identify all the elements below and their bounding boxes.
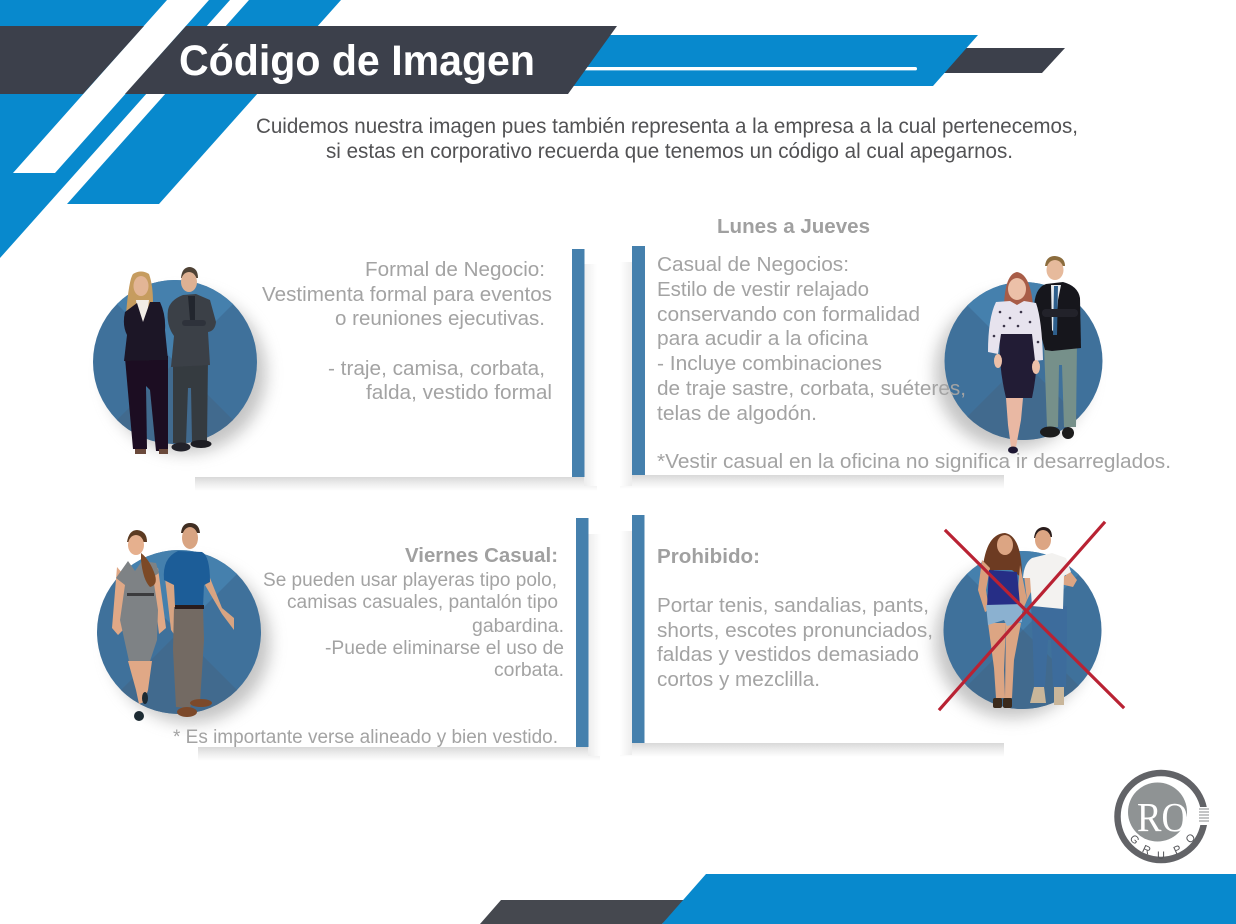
figure: man in t-shirt and jeans xyxy=(1023,527,1077,705)
panel text: camisas casuales, pantalón tipo xyxy=(287,592,558,613)
panel text: conservando con formalidad xyxy=(657,303,920,326)
panel text: gabardina. xyxy=(472,616,564,637)
panel text: falda, vestido formal xyxy=(366,381,552,404)
panel: viernes casual xyxy=(94,518,601,761)
panel text: *Vestir casual en la oficina no significa ir desarreglados. xyxy=(657,450,1171,473)
logo: RO Grupo: P xyxy=(1172,843,1184,857)
figure: woman in grey dress xyxy=(112,530,166,721)
figure: man in blazer xyxy=(1034,256,1081,439)
title banner xyxy=(0,26,617,94)
panel text xyxy=(173,544,564,748)
title: Código de Imagen xyxy=(179,37,535,85)
panel text xyxy=(657,253,1171,473)
panel text xyxy=(262,258,552,404)
intro text: Cuidemos nuestra imagen pues también representa a la empresa a la cual pertenecemos, xyxy=(256,115,1078,138)
figure: businesswoman xyxy=(124,272,168,454)
header right accent bars xyxy=(570,35,1065,86)
logo: RO Grupo: U xyxy=(1157,850,1165,862)
panel text: Vestimenta formal para eventos xyxy=(262,283,552,306)
footer shapes xyxy=(480,874,1236,924)
logo: RO Grupo: R xyxy=(1140,843,1152,857)
panel: formal de negocio xyxy=(90,249,597,491)
panel text: shorts, escotes pronunciados, xyxy=(657,619,933,642)
panel text xyxy=(657,545,933,691)
circle backdrop xyxy=(94,547,270,723)
intro text xyxy=(256,115,1078,163)
panel text: o reuniones ejecutivas. xyxy=(335,307,545,330)
circle backdrop xyxy=(935,547,1106,718)
figure: woman in blouse xyxy=(988,272,1043,454)
figure: woman in tank top and shorts xyxy=(978,533,1027,708)
figure: man in polo xyxy=(164,523,234,717)
intro text: si estas en corporativo recuerda que tenemos un código al cual apegarnos. xyxy=(326,140,1013,163)
panel text: Casual de Negocios: xyxy=(657,253,849,276)
panel: casual de negocios xyxy=(620,246,1171,489)
panel text: corbata. xyxy=(494,660,564,681)
red cross xyxy=(940,523,1123,709)
heading: Lunes a Jueves: Lunes a Jueves xyxy=(717,215,870,238)
panel text: Prohibido: xyxy=(657,545,760,568)
panel text: Formal de Negocio: xyxy=(365,258,545,281)
logo: RO Grupo xyxy=(1118,773,1211,862)
logo: RO Grupo: RO xyxy=(1137,794,1188,840)
circle backdrop xyxy=(935,278,1106,449)
panel text: Estilo de vestir relajado xyxy=(657,278,869,301)
panel text: faldas y vestidos demasiado xyxy=(657,643,919,666)
panel text: para acudir a la oficina xyxy=(657,327,869,350)
panel text: de traje sastre, corbata, suéteres, xyxy=(657,377,966,400)
top-left blue diagonal shapes xyxy=(0,0,341,258)
circle backdrop xyxy=(90,277,266,453)
logo: RO Grupo: G xyxy=(1127,833,1141,847)
panel text: Se pueden usar playeras tipo polo, xyxy=(263,570,557,591)
figure: businessman xyxy=(168,267,216,452)
panel text: telas de algodón. xyxy=(657,402,817,425)
panel text: - Incluye combinaciones xyxy=(657,352,882,375)
panel text: Viernes Casual: xyxy=(405,544,558,567)
panel text: cortos y mezclilla. xyxy=(657,668,820,691)
panel text: -Puede eliminarse el uso de xyxy=(325,638,564,659)
panel: prohibido xyxy=(620,515,1123,757)
logo: RO Grupo: O xyxy=(1184,831,1198,846)
panel text: Portar tenis, sandalias, pants, xyxy=(657,594,929,617)
panel text: * Es importante verse alineado y bien vestido. xyxy=(173,727,558,748)
panel text: - traje, camisa, corbata, xyxy=(328,357,545,380)
